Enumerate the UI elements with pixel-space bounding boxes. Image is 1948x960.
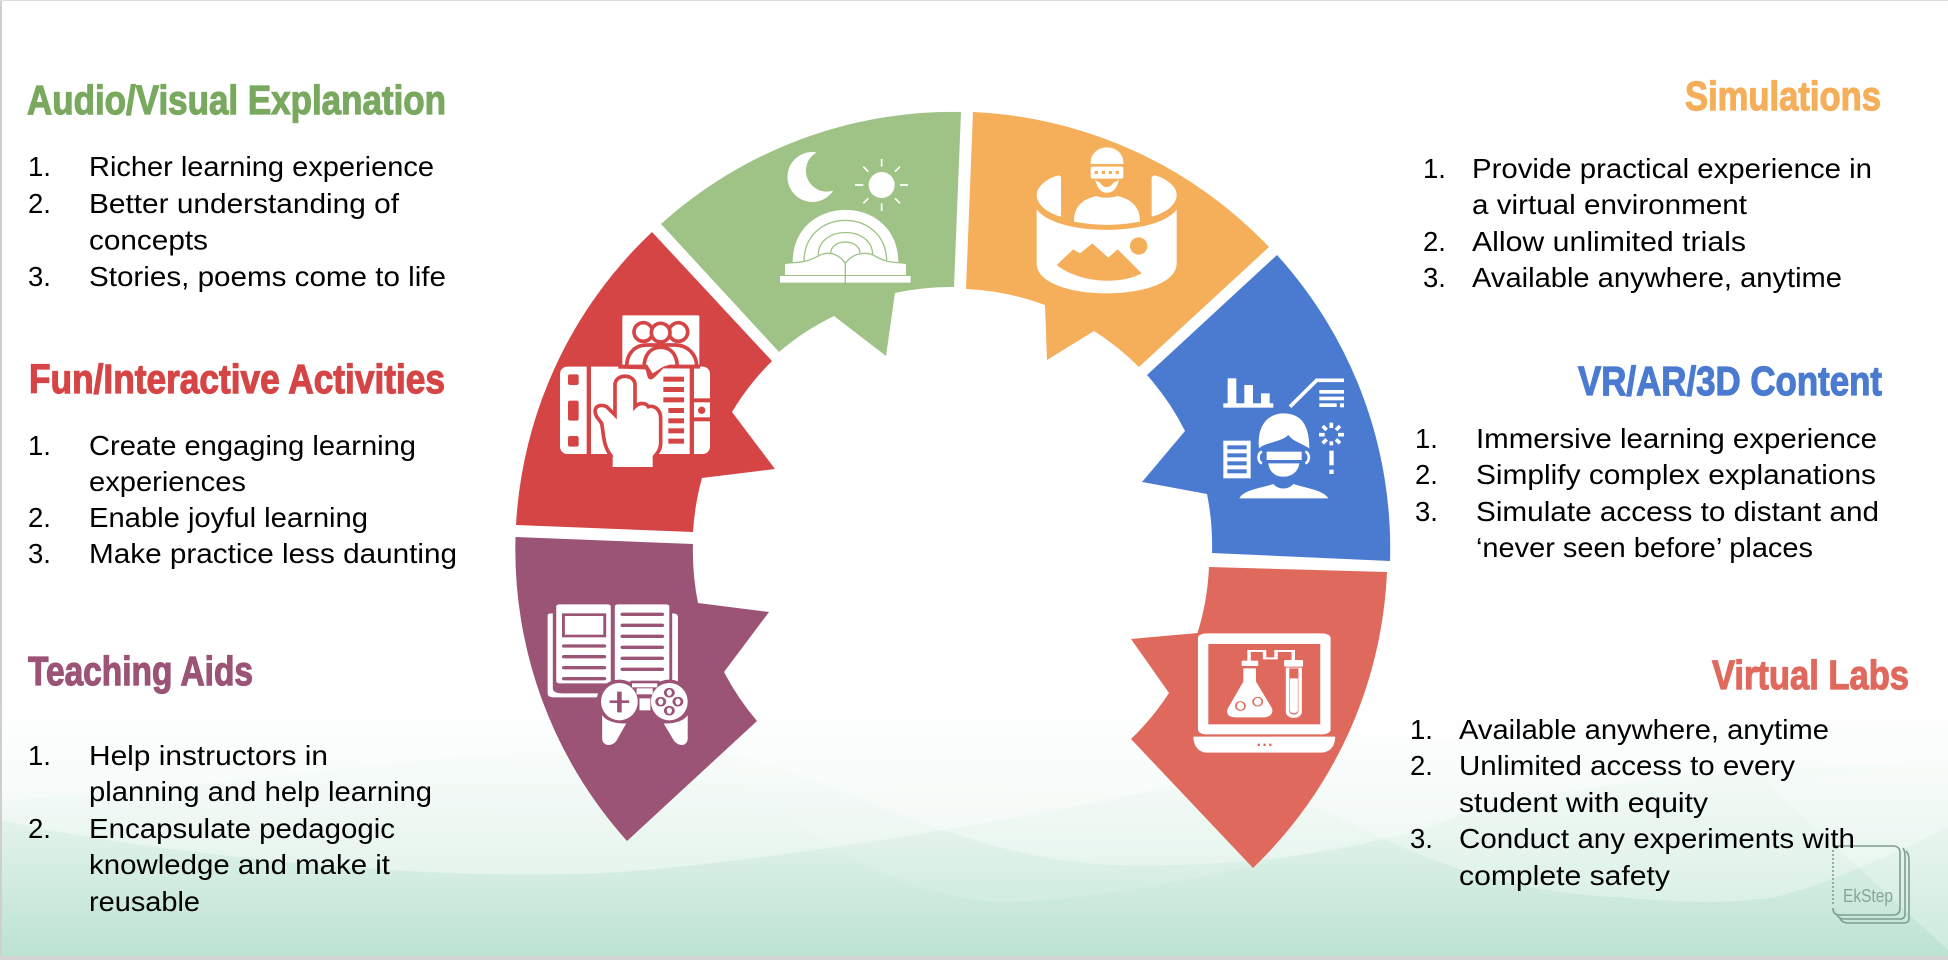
list: 2. [28,813,51,844]
logo: EkStep stacked cards [1833,846,1909,923]
list: 3. [1410,823,1433,854]
list: 2. [1415,459,1438,490]
list: 2. [1410,750,1433,781]
list: Allow unlimited trials [1472,226,1746,257]
icon: open book with game controller [548,604,692,745]
list: experiences [89,466,246,497]
list: 3. [28,538,51,569]
heading: Audio/Visual Explanation [27,77,446,123]
list: Conduct any experiments with [1459,823,1855,854]
list: Encapsulate pedagogic [89,813,395,844]
list: 1. [1415,423,1438,454]
text block: simulations [1423,73,1881,293]
list [28,430,457,569]
list: a virtual environment [1472,189,1747,220]
list: complete safety [1459,860,1670,891]
list: 1. [28,151,51,182]
panel: virtual labs segment [1131,567,1387,868]
list: 1. [1410,714,1433,745]
text block: virtual labs [1410,652,1909,891]
panel: teaching aids segment [515,537,769,841]
heading: Fun/Interactive Activities [29,356,445,402]
list: Better understanding of [89,188,399,219]
heading: Teaching Aids [28,648,253,694]
list [1410,714,1855,891]
list: Simulate access to distant and [1476,496,1879,527]
heading: VR/AR/3D Content [1578,358,1882,404]
list: 1. [28,740,51,771]
panel: fun/interactive segment [516,232,775,532]
list: Enable joyful learning [89,502,368,533]
icon: person in a wraparound virtual screen [1037,147,1177,293]
list: Simplify complex explanations [1476,459,1876,490]
icon: hand tapping a tablet with a group [560,315,710,467]
list: reusable [89,886,200,917]
list [1415,423,1879,563]
list: Stories, poems come to life [89,261,446,292]
list: 3. [1423,262,1446,293]
text block: teaching aids [28,648,432,917]
heading: Virtual Labs [1712,652,1909,698]
heading: Simulations [1685,73,1881,119]
panel: VR/AR/3D segment [1142,255,1390,561]
list [28,740,432,917]
list: Richer learning experience [89,151,434,182]
list: planning and help learning [89,776,432,807]
list: 2. [1423,226,1446,257]
list: Provide practical experience in [1472,153,1872,184]
list: Create engaging learning [89,430,416,461]
panel: audio/visual segment [661,112,961,356]
list: Make practice less daunting [89,538,457,569]
text block: audio/visual explanation [27,77,446,292]
list: 3. [28,261,51,292]
text block: VR/AR/3D content [1415,358,1882,563]
list: 1. [28,430,51,461]
list: Immersive learning experience [1476,423,1877,454]
list [1423,153,1872,293]
list: 1. [1423,153,1446,184]
list: 2. [28,188,51,219]
list: 2. [28,502,51,533]
text block: fun/interactive activities [28,356,457,569]
list: Available anywhere, anytime [1459,714,1829,745]
icon: moon, sun and rainbow over a book [780,152,911,283]
list: 3. [1415,496,1438,527]
list: knowledge and make it [89,849,390,880]
icon: person in VR headset with data panels [1223,378,1344,498]
list: ‘never seen before’ places [1476,532,1813,563]
icon: laptop with flask and test tube [1193,633,1335,753]
list: Help instructors in [89,740,328,771]
list: Unlimited access to every [1459,750,1795,781]
list: concepts [89,224,208,256]
panel: simulations segment [966,112,1269,367]
list: Available anywhere, anytime [1472,262,1842,293]
logo: EkStep stacked cards: EkStep [1843,886,1893,906]
list: student with equity [1459,787,1708,818]
list [28,151,446,292]
